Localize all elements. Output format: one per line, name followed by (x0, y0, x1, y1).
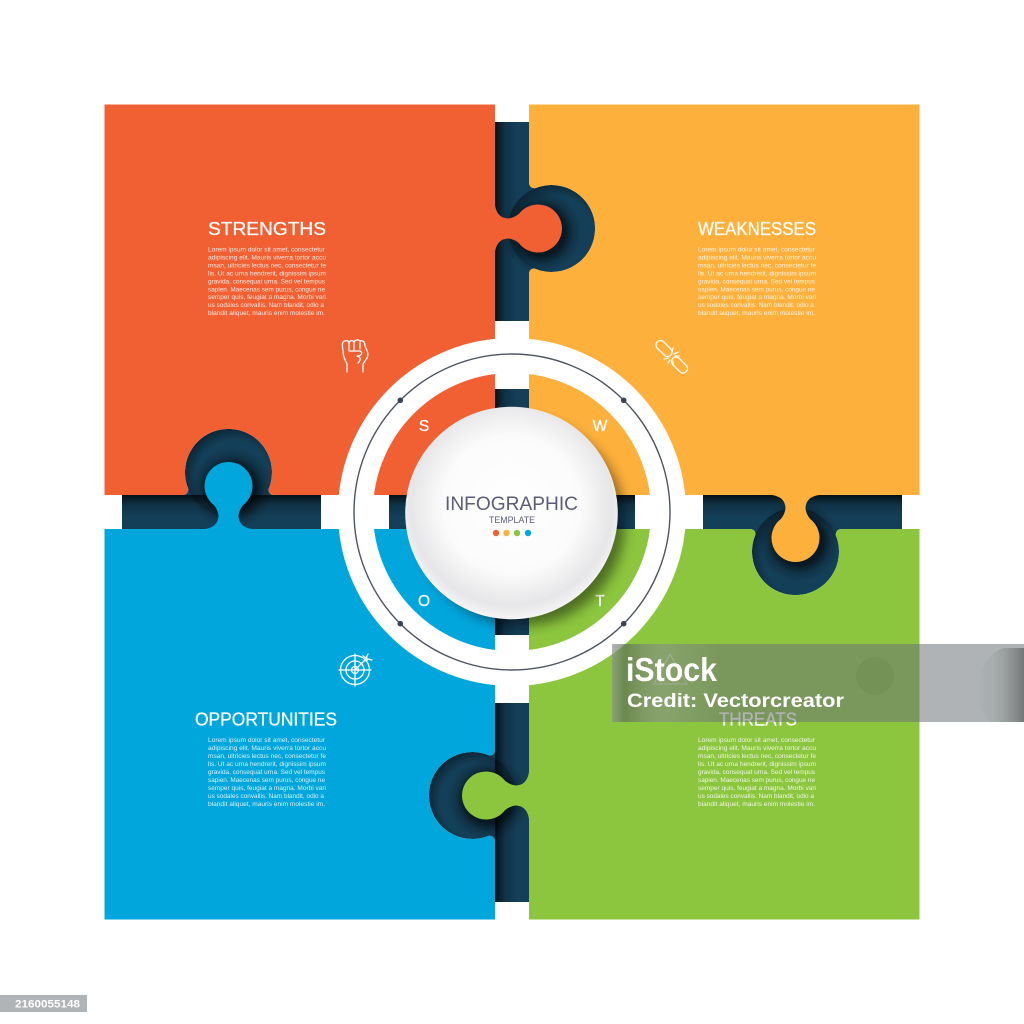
watermark band (612, 644, 1024, 722)
text block: threats: semper quis, feugiat a magna. Morbi vari (698, 785, 816, 792)
panel: strengths puzzle piece (104, 104, 562, 495)
colour dots (493, 530, 531, 536)
text block: weaknesses: msan, ultricies lectus nec, consectetur fe (698, 262, 816, 270)
text block: threats (698, 737, 816, 808)
text block: weaknesses: adipiscing elit. Mauris viverra tortor accu (698, 254, 816, 262)
icon: target with arrow (339, 654, 372, 686)
text block: weaknesses: sapien. Maecenas sem purus, congue ne (698, 286, 815, 293)
text block: threats: sapien. Maecenas sem purus, congue ne (698, 777, 815, 784)
text block: threats: msan, ultricies lectus nec, consectetur fe (698, 753, 816, 760)
thin ring with four dots (354, 354, 670, 670)
text block: strengths: us sodales convallis. Nam blandit, odio a (208, 302, 324, 309)
text block: strengths: adipiscing elit. Mauris viverra tortor accu (208, 254, 326, 262)
text block: strengths: lis. Ut ac urna hendrerit, dignissim ipsum (208, 270, 326, 277)
text block: strengths: blandit aliquet, mauris enim molestie im. (208, 310, 325, 317)
icon: raised fist (342, 340, 368, 372)
central title: INFOGRAPHIC (445, 493, 578, 515)
watermark credit: Credit: Vectorcreator (627, 691, 845, 712)
central title (445, 493, 578, 525)
dark puzzle channels with inner shading (122, 122, 902, 902)
text block: opportunities: blandit aliquet, mauris enim molestie im. (208, 801, 325, 808)
text block: opportunities: lis. Ut ac urna hendrerit, dignissim ipsum (208, 761, 326, 768)
panel: weaknesses puzzle piece (529, 104, 920, 562)
central title: TEMPLATE (489, 515, 535, 525)
sector letter T: T (595, 593, 605, 610)
text block: strengths: sapien. Maecenas sem purus, congue ne (208, 286, 325, 293)
central disc (405, 407, 618, 619)
icon: threat triangle (654, 654, 687, 684)
text block: weaknesses: us sodales convallis. Nam blandit, odio a (698, 302, 814, 309)
sector letter W: W (593, 418, 608, 435)
text block: opportunities: sapien. Maecenas sem purus, congue ne (208, 777, 325, 784)
panel: opportunities puzzle piece (104, 462, 495, 920)
text block: threats: Lorem ipsum dolor sit amet, consectetur (698, 737, 816, 744)
stock id tag (0, 995, 87, 1012)
stock id tag: 2160055148 (15, 998, 80, 1010)
text block: opportunities: us sodales convallis. Nam blandit, odio a (208, 793, 324, 800)
text block: strengths: semper quis, feugiat a magna. Morbi vari (208, 294, 326, 301)
white ring around centre (356, 356, 668, 668)
text block: threats: blandit aliquet, mauris enim molestie im. (698, 801, 815, 808)
icon: broken chain (654, 339, 689, 375)
text block: weaknesses (698, 246, 816, 317)
text block: opportunities: Lorem ipsum dolor sit amet, consectetur (208, 737, 326, 744)
central disc shadow (419, 420, 625, 626)
text block: weaknesses: blandit aliquet, mauris enim molestie im. (698, 310, 815, 317)
text block: strengths (208, 246, 326, 317)
text block: opportunities (208, 737, 326, 808)
heading: threats: THREATS (719, 710, 797, 730)
text block: opportunities: adipiscing elit. Mauris viverra tortor accu (208, 745, 326, 752)
sector letter S: S (419, 418, 429, 435)
text block: threats: us sodales convallis. Nam blandit, odio a (698, 793, 814, 800)
text block: weaknesses: lis. Ut ac urna hendrerit, dignissim ipsum (698, 270, 816, 277)
heading: strengths: STRENGTHS (208, 219, 326, 239)
text block: strengths: Lorem ipsum dolor sit amet, consectetur (208, 246, 326, 254)
text block: weaknesses: Lorem ipsum dolor sit amet, consectetur (698, 246, 816, 254)
text block: threats: lis. Ut ac urna hendrerit, dignissim ipsum (698, 761, 816, 768)
text block: threats: gravida, consequat urna. Sed vel tempus (698, 769, 816, 776)
sector letter O: O (418, 593, 430, 610)
text block: strengths: gravida, consequat urna. Sed vel tempus (208, 278, 326, 285)
panel: threats puzzle piece (462, 529, 920, 920)
text block: opportunities: semper quis, feugiat a magna. Morbi vari (208, 785, 326, 792)
text block: opportunities: msan, ultricies lectus nec, consectetur fe (208, 753, 326, 760)
text block: strengths: msan, ultricies lectus nec, consectetur fe (208, 262, 326, 270)
text block: threats: adipiscing elit. Mauris viverra tortor accu (698, 745, 816, 752)
text block: weaknesses: gravida, consequat urna. Sed vel tempus (698, 278, 816, 285)
heading: weaknesses: WEAKNESSES (698, 219, 816, 239)
text block: opportunities: gravida, consequat urna. Sed vel tempus (208, 769, 326, 776)
text block: weaknesses: semper quis, feugiat a magna. Morbi vari (698, 294, 816, 301)
heading: opportunities: OPPORTUNITIES (195, 710, 337, 730)
watermark logo: iStock (626, 651, 718, 688)
